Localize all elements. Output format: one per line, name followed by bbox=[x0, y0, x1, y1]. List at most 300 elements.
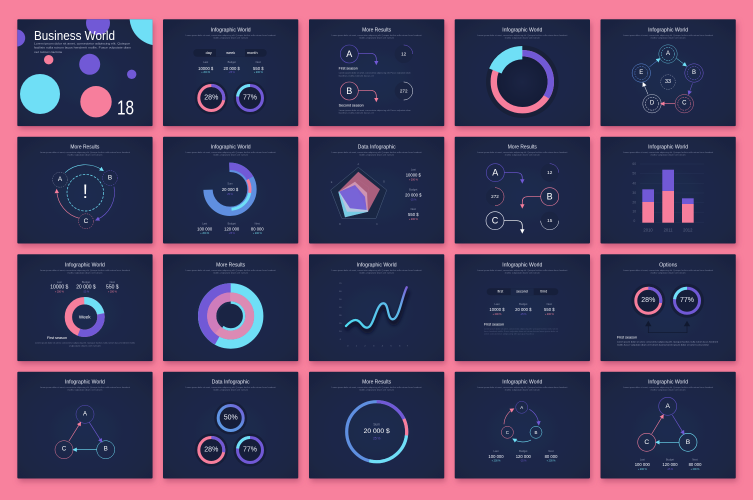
radar axis labels: B bbox=[383, 181, 385, 184]
card background bbox=[17, 137, 153, 244]
progress 15: 15 bbox=[547, 218, 553, 223]
stats row: Next bbox=[692, 458, 698, 462]
heading bbox=[332, 262, 422, 274]
panel: Infographic World day week month bbox=[163, 19, 298, 126]
stats row: + 200 % bbox=[493, 313, 502, 316]
center exclamation: ! bbox=[83, 182, 88, 203]
y axis labels: 70 bbox=[339, 283, 342, 285]
option tabs: third bbox=[540, 290, 547, 294]
card background bbox=[17, 19, 153, 126]
first season text: Lorem ipsum dolor sit amet, consectetur adipiscing elit. Quisque facilisis nulla rutrum lacus hendrerit mollis bbox=[35, 342, 136, 345]
period tabs bbox=[193, 49, 267, 57]
progress 12: 12 bbox=[401, 52, 407, 56]
bar chart: 2010 bbox=[643, 228, 653, 232]
stats row: 100 000 bbox=[635, 462, 651, 467]
first season text: lacus hendrerit mollis. Fusce vulputate diam vel rutrum lacinia lorem ipsum dolor sit bbox=[484, 330, 558, 333]
panel: Infographic World line chart bbox=[309, 254, 444, 361]
heading: mollis vulputate diam vel rutrum bbox=[651, 271, 686, 274]
heading bbox=[40, 262, 130, 274]
panel: Infographic World small cycle bbox=[455, 372, 590, 478]
stats row: 550 $ bbox=[253, 66, 264, 71]
stats row: Last bbox=[494, 449, 499, 453]
x axis labels: 0 bbox=[347, 345, 349, 347]
x axis labels: 4 bbox=[382, 345, 384, 347]
donut 28 percent: 28% bbox=[641, 297, 655, 304]
node B with arrow: B bbox=[346, 86, 352, 96]
stats row: Budget bbox=[519, 302, 528, 306]
heading: Lorem ipsum dolor sit amet, consectetur adipiscing elit. Quisque facilisis nulla rutrum lacus hendrerit bbox=[623, 269, 713, 272]
decorative circles bbox=[17, 19, 153, 118]
panel: Business World cover bbox=[16, 19, 157, 132]
heading: Lorem ipsum dolor sit amet, consectetur adipiscing elit. Quisque facilisis nulla rutrum lacus hendrerit bbox=[186, 151, 276, 154]
node A: A bbox=[665, 403, 670, 410]
heading: mollis vulputate diam vel rutrum bbox=[67, 271, 103, 274]
heading bbox=[477, 27, 568, 39]
heading: mollis vulputate diam vel rutrum bbox=[359, 36, 394, 39]
heading: mollis vulputate diam vel rutrum bbox=[67, 154, 103, 157]
y axis labels: 60 bbox=[339, 291, 342, 293]
x axis labels: 7 bbox=[407, 345, 409, 347]
heading bbox=[332, 145, 422, 157]
heading: Lorem ipsum dolor sit amet, consectetur adipiscing elit. Quisque facilisis nulla rutrum lacus hendrerit bbox=[477, 151, 568, 154]
bar chart: 10 bbox=[632, 210, 636, 214]
card background bbox=[309, 137, 444, 244]
heading: mollis vulputate diam vel rutrum bbox=[213, 154, 248, 157]
heading: Lorem ipsum dolor sit amet, consectetur adipiscing elit. Quisque facilisis nulla rutrum lacus hendrerit bbox=[332, 151, 422, 154]
heading bbox=[332, 27, 422, 39]
heading: mollis vulputate diam vel rutrum bbox=[359, 154, 394, 157]
progress 12: 12 bbox=[547, 170, 553, 175]
donut 77 percent: 77% bbox=[243, 94, 257, 101]
first season text: First season bbox=[484, 322, 504, 326]
connecting arrows bbox=[645, 321, 690, 333]
ring center value bbox=[364, 422, 390, 440]
panel: Data Infographic three donuts bbox=[163, 372, 298, 478]
stats row: 20 000 $ bbox=[515, 307, 532, 312]
heading bbox=[623, 262, 713, 274]
node B: B bbox=[104, 447, 108, 453]
heading: Lorem ipsum dolor sit amet, consectetur adipiscing elit. Quisque facilisis nulla rutrum lacus hendrerit bbox=[623, 151, 713, 154]
card background bbox=[309, 254, 444, 361]
first season text: First season bbox=[339, 67, 358, 71]
triangle arrows bbox=[652, 415, 684, 442]
node A: A bbox=[83, 411, 87, 417]
stats row: + 200 % bbox=[547, 460, 556, 463]
first season text: Lorem ipsum dolor sit amet, consectetur adipiscing elit. Quisque facilisis nulla rutrum bbox=[484, 327, 558, 330]
stats row: 20 000 $ bbox=[224, 66, 241, 71]
heading: Lorem ipsum dolor sit amet, consectetur adipiscing elit. Quisque facilisis nulla rutrum lacus hendrerit bbox=[477, 269, 568, 272]
heading bbox=[40, 380, 130, 392]
node B: B bbox=[535, 430, 538, 435]
y axis labels: 10 bbox=[339, 331, 342, 333]
heading: Lorem ipsum dolor sit amet, consectetur adipiscing elit. Quisque facilisis nulla rutrum lacus hendrerit bbox=[40, 151, 130, 154]
cover description: vel rutrum lacinia bbox=[34, 50, 62, 54]
stats row: + 200 % bbox=[201, 71, 211, 74]
radar axis labels: D bbox=[339, 223, 341, 226]
stats row: Budget bbox=[666, 458, 674, 462]
radar axis labels: C bbox=[376, 223, 378, 226]
x axis labels: 1 bbox=[356, 345, 358, 347]
stats row: -25 % bbox=[667, 468, 674, 471]
stats row bbox=[489, 302, 555, 316]
heading: mollis vulputate diam vel rutrum bbox=[213, 36, 248, 39]
stats row: Last bbox=[495, 302, 500, 306]
heading: Infographic World bbox=[211, 27, 251, 33]
heading: mollis vulputate diam vel rutrum bbox=[505, 271, 540, 274]
bar chart: 50 bbox=[632, 172, 636, 176]
stats row: + 200 % bbox=[108, 291, 118, 294]
node E: E bbox=[639, 70, 643, 76]
ring chart bbox=[347, 402, 407, 462]
card background bbox=[600, 137, 736, 244]
period tabs: day bbox=[206, 51, 212, 55]
x axis labels: 6 bbox=[399, 345, 401, 347]
heading: mollis vulputate diam vel rutrum bbox=[359, 271, 394, 274]
stats row: 10000 $ bbox=[50, 284, 69, 290]
heading: Lorem ipsum dolor sit amet, consectetur adipiscing elit. Quisque facilisis nulla rutrum lacus hendrerit bbox=[332, 34, 422, 37]
stats row bbox=[635, 458, 702, 471]
second season text: Second season bbox=[339, 104, 364, 108]
heading: Data Infographic bbox=[212, 380, 250, 386]
node A: A bbox=[666, 51, 670, 57]
stats row: 120 000 bbox=[224, 226, 240, 232]
stats row: Next bbox=[255, 222, 260, 226]
progress 272: 272 bbox=[491, 194, 499, 199]
stats row: -25 % bbox=[520, 460, 527, 463]
card background bbox=[163, 19, 298, 126]
card background bbox=[309, 19, 444, 126]
heading: Infographic World bbox=[648, 380, 688, 386]
heading: Lorem ipsum dolor sit amet, consectetur adipiscing elit. Quisque facilisis nulla rutrum lacus hendrerit bbox=[332, 386, 422, 389]
heading bbox=[623, 145, 713, 157]
radial chart: 20 000 $ bbox=[222, 187, 239, 192]
bar chart: 60 bbox=[632, 162, 636, 166]
card background bbox=[163, 137, 298, 244]
card background bbox=[600, 19, 736, 126]
stats row: 100 000 bbox=[197, 226, 213, 232]
stats row: Budget bbox=[519, 449, 528, 453]
panel: Options paired donuts bbox=[600, 254, 736, 361]
node B: B bbox=[692, 70, 696, 76]
stats row: + 200 % bbox=[691, 468, 700, 471]
heading: More Results bbox=[362, 27, 391, 33]
stats row: Next bbox=[256, 60, 261, 64]
heading: Lorem ipsum dolor sit amet, consectetur adipiscing elit. Quisque facilisis nulla rutrum lacus hendrerit bbox=[477, 386, 568, 389]
option tabs: second bbox=[516, 290, 528, 294]
heading bbox=[332, 380, 422, 392]
first season text bbox=[339, 67, 411, 77]
card background bbox=[455, 137, 590, 244]
cycle arrows bbox=[504, 409, 539, 442]
heading: mollis vulputate diam vel rutrum bbox=[651, 389, 686, 392]
panel: Infographic World triangle flow bbox=[17, 372, 153, 478]
donut 28 percent: 28% bbox=[204, 447, 218, 454]
donut 28 percent: 28% bbox=[204, 94, 218, 101]
stats column: -25 % bbox=[410, 198, 417, 202]
stats row: -25 % bbox=[229, 232, 236, 235]
connecting arrows bbox=[644, 58, 692, 104]
heading: mollis vulputate diam vel rutrum bbox=[213, 389, 248, 392]
heading: Infographic World bbox=[502, 380, 542, 386]
heading bbox=[186, 27, 276, 39]
panel: Infographic World five step cycle bbox=[600, 19, 736, 126]
panel: Infographic World first second third bbox=[455, 254, 590, 361]
card background bbox=[17, 254, 153, 361]
first season text bbox=[484, 322, 558, 336]
card background bbox=[600, 254, 736, 361]
y axis labels: 20 bbox=[339, 323, 342, 325]
stats column: 10000 $ bbox=[406, 172, 422, 177]
node B with arrow: B bbox=[547, 192, 553, 202]
bar chart bbox=[632, 162, 704, 232]
stats row: Budget bbox=[228, 222, 236, 226]
node C with arrow: C bbox=[492, 216, 499, 226]
cover description: Lorem ipsum dolor sit amet, consectetur adipiscing elit. Quisque bbox=[34, 42, 130, 46]
stats row: 80 000 bbox=[689, 462, 702, 467]
stats column: Next bbox=[411, 207, 416, 211]
card background bbox=[600, 372, 736, 478]
card background bbox=[17, 372, 153, 478]
panel: More Results circular A B C bbox=[17, 137, 153, 244]
heading: More Results bbox=[70, 145, 100, 151]
card background bbox=[455, 372, 590, 478]
donut 50 percent: 50% bbox=[224, 415, 238, 422]
stats column bbox=[405, 168, 422, 221]
first season text: First season bbox=[47, 336, 67, 340]
ring center value: 20 000 $ bbox=[364, 428, 390, 435]
heading: Lorem ipsum dolor sit amet, consectetur adipiscing elit. Quisque facilisis nulla rutrum lacus hendrerit bbox=[186, 386, 276, 389]
heading: mollis vulputate diam vel rutrum bbox=[651, 154, 686, 157]
card background bbox=[455, 254, 590, 361]
first season text: facilisis nulla rutrum lacus et bbox=[339, 74, 374, 77]
heading: Infographic World bbox=[502, 262, 542, 268]
heading: More Results bbox=[362, 380, 391, 386]
node A: A bbox=[520, 405, 523, 410]
x axis labels: 2 bbox=[364, 345, 366, 347]
bar chart: 40 bbox=[632, 181, 636, 185]
stats row: 550 $ bbox=[544, 307, 555, 312]
stats row: Last bbox=[203, 60, 208, 64]
x axis labels bbox=[347, 345, 409, 347]
heading: mollis vulputate diam vel rutrum bbox=[67, 389, 103, 392]
stats row: 550 $ bbox=[106, 284, 119, 290]
heading: More Results bbox=[508, 145, 537, 151]
stats row bbox=[50, 280, 119, 294]
y axis labels: 30 bbox=[339, 315, 342, 317]
heading: Lorem ipsum dolor sit amet, consectetur adipiscing elit. Quisque facilisis nulla rutrum lacus hendrerit bbox=[186, 34, 276, 37]
card background bbox=[163, 254, 298, 361]
heading: Data Infographic bbox=[358, 145, 396, 151]
heading: mollis vulputate diam vel rutrum bbox=[505, 36, 540, 39]
stats row: Next bbox=[110, 280, 115, 284]
stats row: 120 000 bbox=[516, 454, 532, 459]
stats row: + 200 % bbox=[55, 291, 65, 294]
heading bbox=[186, 145, 276, 157]
node A with arrow: A bbox=[492, 168, 498, 178]
stats row: Last bbox=[202, 222, 207, 226]
radar axis labels bbox=[331, 163, 385, 226]
bar chart: 0 bbox=[633, 219, 635, 223]
first season text: Lorem ipsum dolor sit amet, consectetur adipiscing elit. Quisque facilisis nulla rutrum lacus hendrerit bbox=[617, 341, 718, 344]
bar chart: 30 bbox=[632, 191, 636, 195]
stats row: -25 % bbox=[229, 71, 236, 74]
stats row: + 200 % bbox=[492, 460, 501, 463]
heading: mollis vulputate diam vel rutrum bbox=[505, 389, 540, 392]
week donut chart: Week bbox=[79, 315, 91, 320]
stats row bbox=[198, 60, 264, 74]
card background bbox=[309, 372, 444, 478]
heading: mollis vulputate diam vel rutrum bbox=[505, 154, 540, 157]
heading: Lorem ipsum dolor sit amet, consectetur adipiscing elit. Quisque facilisis nulla rutrum lacus hendrerit bbox=[623, 34, 713, 37]
stats row: Next bbox=[548, 449, 554, 453]
heading: Lorem ipsum dolor sit amet, consectetur adipiscing elit. Quisque facilisis nulla rutrum lacus hendrerit bbox=[623, 386, 713, 389]
period tabs: week bbox=[226, 51, 235, 55]
heading: Infographic World bbox=[357, 262, 397, 268]
node B: B bbox=[108, 174, 112, 181]
stats row: 10000 $ bbox=[489, 307, 505, 312]
radial chart: 25 % bbox=[227, 193, 234, 196]
donut 77 percent: 77% bbox=[680, 297, 694, 304]
radar axis labels: E bbox=[331, 181, 333, 184]
stats row: 80 000 bbox=[545, 454, 558, 459]
stats column: + 200 % bbox=[409, 218, 419, 221]
heading: mollis vulputate diam vel rutrum bbox=[651, 36, 686, 39]
node A with arrow: A bbox=[346, 49, 352, 59]
second season text: facilisis nulla rutrum lacus et bbox=[339, 112, 374, 115]
card background bbox=[455, 19, 590, 126]
panel: Data Infographic radar bbox=[309, 137, 444, 244]
stats column: Last bbox=[411, 167, 416, 171]
stats row bbox=[488, 449, 558, 462]
node C: C bbox=[62, 447, 67, 453]
stats row: + 200 % bbox=[254, 71, 264, 74]
heading: Infographic World bbox=[648, 145, 688, 151]
stats row: -25 % bbox=[83, 291, 90, 294]
stats row: + 200 % bbox=[638, 468, 648, 471]
heading: Lorem ipsum dolor sit amet, consectetur adipiscing elit. Quisque facilisis nulla rutrum lacus hendrerit bbox=[40, 269, 130, 272]
heading bbox=[186, 262, 276, 274]
cover description: facilisis nulla rutrum lacus hendrerit mollis. Fusce vulputate diam bbox=[34, 46, 132, 50]
option tabs bbox=[487, 288, 558, 295]
panel: Infographic World large donut bbox=[455, 19, 590, 126]
panel: More Results concentric rings bbox=[163, 254, 298, 361]
heading bbox=[186, 380, 276, 392]
bar chart: 2012 bbox=[683, 228, 693, 232]
center value: 33 bbox=[665, 79, 671, 85]
cover description bbox=[34, 42, 132, 54]
large donut chart bbox=[486, 45, 559, 118]
option tabs: first bbox=[498, 290, 503, 294]
stats column: Budget bbox=[409, 187, 418, 191]
bar chart: 20 bbox=[632, 201, 636, 205]
panel: More Results A B C flow bbox=[455, 137, 590, 244]
node C: C bbox=[644, 439, 649, 446]
stats row: + 200 % bbox=[200, 232, 210, 235]
node C: C bbox=[682, 101, 687, 107]
stats row: + 200 % bbox=[545, 313, 555, 316]
period tabs: month bbox=[247, 51, 258, 55]
triangle arrows bbox=[69, 422, 101, 450]
cover title: Business World bbox=[34, 28, 115, 43]
bar chart: 2011 bbox=[664, 228, 673, 232]
stats row: Budget bbox=[82, 280, 90, 284]
heading bbox=[477, 380, 568, 392]
heading: mollis vulputate diam vel rutrum bbox=[359, 389, 394, 392]
stats row: Last bbox=[640, 458, 645, 462]
panel: Infographic World stacked bar chart bbox=[600, 137, 736, 244]
heading: Infographic World bbox=[648, 27, 688, 33]
second season text bbox=[339, 104, 411, 115]
first season text: amet consectetur adipiscing elit quisque facilisis bbox=[484, 333, 535, 336]
y axis labels: 40 bbox=[339, 307, 342, 309]
x axis labels: 3 bbox=[373, 345, 375, 347]
concentric ring chart bbox=[203, 288, 259, 344]
heading: mollis vulputate diam vel rutrum bbox=[213, 271, 248, 274]
heading bbox=[623, 380, 713, 392]
stats column: 20 000 $ bbox=[405, 192, 422, 197]
panel: Infographic World triangle with stats bbox=[600, 372, 736, 478]
year number: 18 bbox=[117, 97, 134, 119]
progress 272: 272 bbox=[400, 88, 408, 93]
stats row: Next bbox=[547, 302, 552, 306]
heading: Infographic World bbox=[502, 27, 542, 33]
second season text: Lorem ipsum dolor sit amet, consectetur adipiscing elit. Fusce vulputate diam bbox=[339, 109, 411, 112]
stats column: 550 $ bbox=[408, 212, 419, 217]
node C: C bbox=[84, 218, 89, 225]
stats row bbox=[197, 222, 264, 235]
heading: Lorem ipsum dolor sit amet, consectetur adipiscing elit. Quisque facilisis nulla rutrum lacus hendrerit bbox=[40, 386, 130, 389]
x axis labels: 5 bbox=[390, 345, 392, 347]
line chart curve bbox=[346, 287, 408, 331]
node A: A bbox=[58, 176, 63, 183]
stats column: + 200 % bbox=[409, 178, 419, 181]
card background bbox=[163, 372, 298, 478]
radar axis labels: A bbox=[357, 163, 359, 166]
stats row: 80 000 bbox=[251, 226, 264, 232]
ring center value: Sum bbox=[373, 422, 380, 426]
first season text: mollis fusce vulputate diam vel rutrum lacinia lorem ipsum dolor sit amet consectetur bbox=[617, 343, 709, 346]
panel: More Results thin ring bbox=[309, 372, 444, 478]
y axis labels: 0 bbox=[340, 339, 342, 341]
heading: Infographic World bbox=[65, 262, 105, 268]
node C: C bbox=[506, 430, 509, 435]
y axis labels bbox=[339, 283, 342, 341]
radial chart: Sum bbox=[227, 181, 233, 185]
stats row: 120 000 bbox=[662, 462, 678, 467]
heading bbox=[40, 145, 130, 157]
heading bbox=[477, 145, 568, 157]
panel: Infographic World week donut bbox=[17, 254, 153, 361]
y axis labels: 50 bbox=[339, 299, 342, 301]
panel: Infographic World radial bars bbox=[163, 137, 298, 244]
heading: Options bbox=[659, 262, 677, 268]
first season text: Lorem ipsum dolor sit amet, consectetur adipiscing elit. Fusce vulputate diam bbox=[339, 72, 411, 75]
first season text: First season bbox=[617, 336, 637, 340]
heading: Infographic World bbox=[211, 145, 251, 151]
first season text bbox=[617, 336, 718, 346]
stats row: 10000 $ bbox=[198, 66, 214, 71]
heading: Infographic World bbox=[65, 380, 105, 386]
panel: More Results A B season flow bbox=[309, 19, 444, 126]
stats row: 20 000 $ bbox=[76, 284, 96, 290]
node D: D bbox=[650, 101, 655, 107]
donut 77 percent: 77% bbox=[243, 447, 257, 454]
circular arrows bbox=[57, 165, 115, 220]
ring center value: 25 % bbox=[373, 436, 380, 440]
stats row: 100 000 bbox=[488, 454, 504, 459]
stats row: Budget bbox=[228, 60, 236, 64]
heading: Lorem ipsum dolor sit amet, consectetur adipiscing elit. Quisque facilisis nulla rutrum lacus hendrerit bbox=[477, 34, 568, 37]
